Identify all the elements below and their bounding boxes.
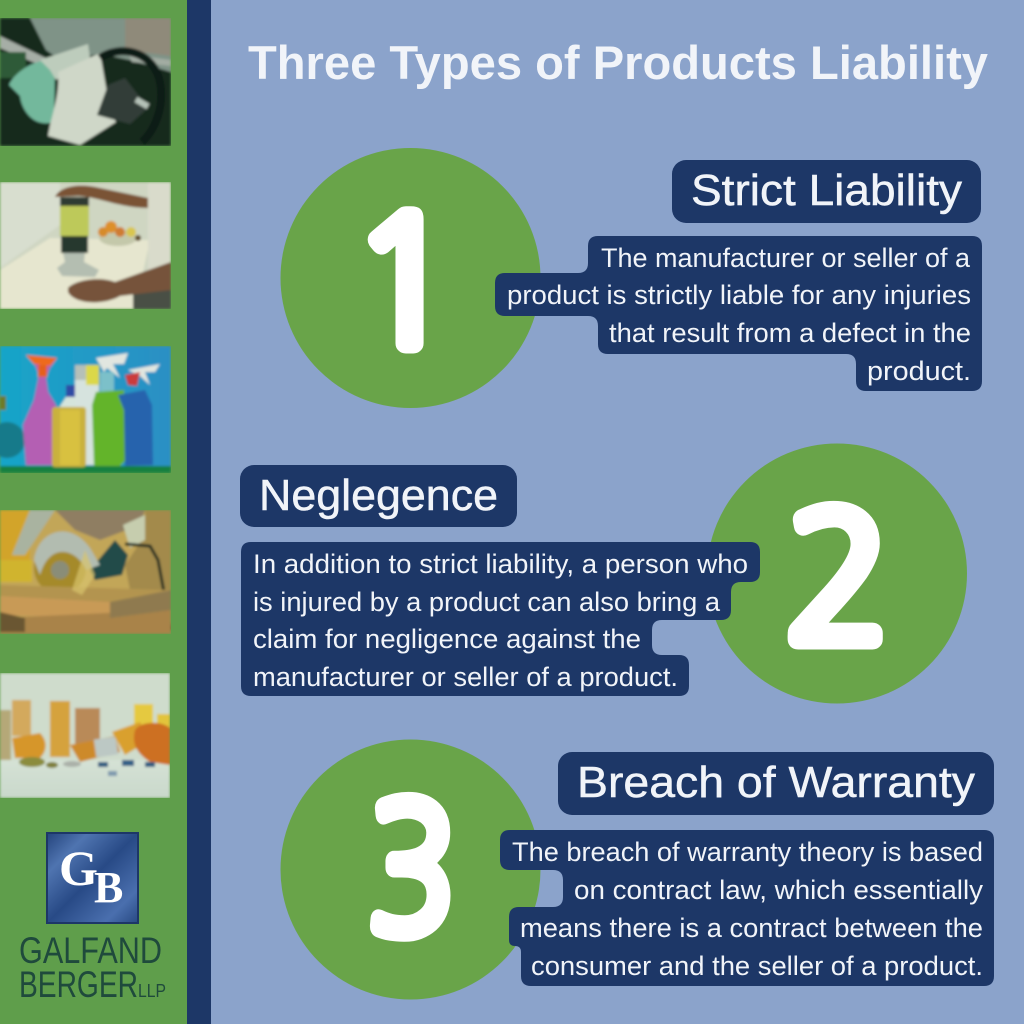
panel: negligence [240, 444, 967, 704]
text block: breach of warranty description: on contract law, which essentially [574, 875, 984, 905]
text block: breach of warranty description: means there is a contract between the [520, 913, 983, 943]
text block: strict liability description: that result from a defect in the [609, 318, 971, 348]
heading: neglegence: Neglegence [259, 471, 498, 520]
photo: spilled medicine bottles [0, 673, 170, 798]
title: Three Types of Products Liability [248, 36, 988, 89]
monogram letter G: G [59, 840, 98, 896]
word: Berger LLP: LLP [138, 981, 166, 1001]
firm name [19, 930, 166, 1005]
number circle 1: 1 [351, 195, 457, 371]
number circle 2: 2 [785, 491, 891, 667]
word: Berger LLP: BERGER [19, 964, 138, 1005]
panel: strict liability [280, 148, 982, 408]
heading: breach of warranty [558, 752, 994, 815]
green sidebar [0, 0, 187, 1024]
panel: breach of warranty [280, 740, 994, 1000]
number circle 3 [280, 740, 540, 1000]
heading: strict liability: Strict Liability [691, 166, 962, 215]
number circle 3: 3 [367, 783, 457, 958]
photo: cleaning product bottles [0, 346, 171, 473]
navy sidebar stripe [187, 0, 211, 1024]
text block: breach of warranty description: consumer and the seller of a product. [531, 951, 983, 981]
heading: strict liability [672, 160, 981, 223]
text block: negligence description: In addition to strict liability, a person who [253, 549, 748, 579]
text block: strict liability description [495, 236, 982, 391]
text block: strict liability description: The manufacturer or seller of a [601, 243, 971, 273]
number circle 1 [280, 148, 540, 408]
text block: negligence description: claim for negligence against the [253, 624, 641, 654]
text block: negligence description: manufacturer or seller of a product. [253, 662, 678, 692]
photo: kitchen blender [0, 182, 171, 309]
text block: breach of warranty description [500, 830, 994, 986]
text block: strict liability description: product is strictly liable for any injuries [507, 280, 971, 310]
logo: GB monogram [46, 832, 139, 924]
text block: breach of warranty description: The breach of warranty theory is based [512, 837, 983, 867]
word: Galfand: GALFAND [19, 930, 162, 971]
photo: deployed airbags in car [0, 18, 171, 146]
heading: neglegence [240, 465, 517, 527]
monogram letter B: B [94, 863, 123, 912]
heading: breach of warranty: Breach of Warranty [577, 758, 975, 807]
text block: strict liability description: product. [867, 356, 971, 386]
photo: circular saw cutting wood [0, 510, 171, 634]
number circle 2 [707, 444, 967, 704]
text block: negligence description: is injured by a product can also bring a [253, 587, 721, 617]
text block: negligence description [241, 542, 760, 696]
